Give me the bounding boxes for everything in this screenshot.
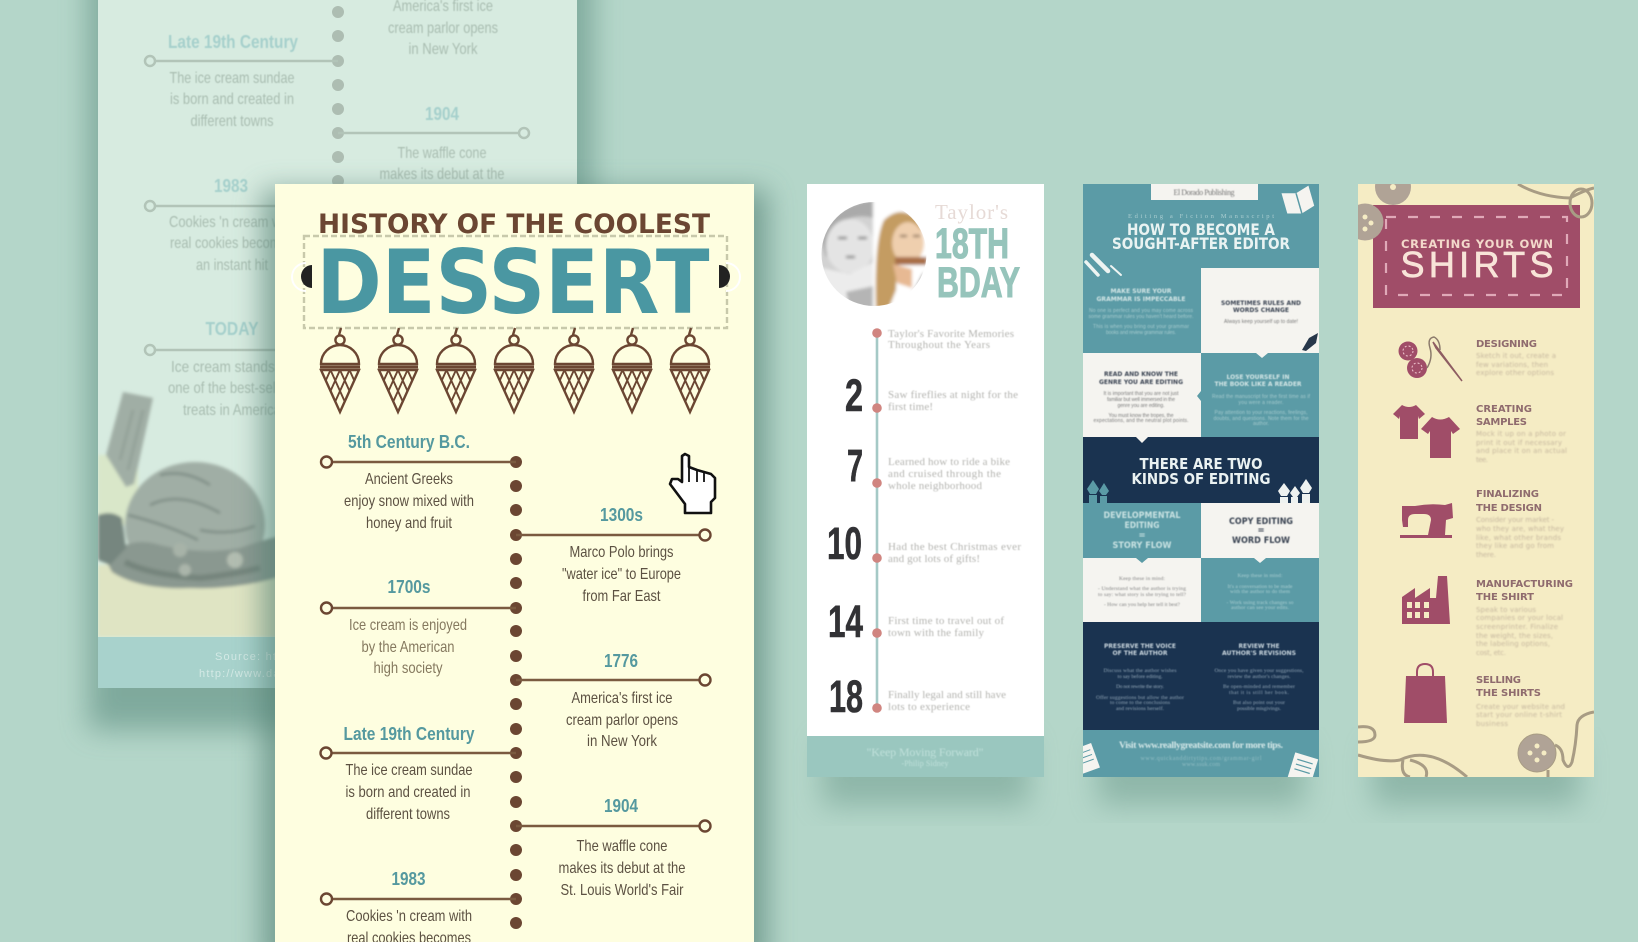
footer: visit site: Visit www.reallygreatsite.com for more tips.: [1119, 741, 1283, 751]
block: copy editing tips: It's a conversation to be made: [1228, 584, 1293, 590]
grid block: rules change: WORDS CHANGE: [1233, 307, 1289, 314]
step: selling the shirts: Create your website and: [1476, 703, 1565, 711]
memory descriptions: [888, 328, 1021, 713]
ghost timeline text: [168, 0, 505, 419]
ghost timeline text: Cookies 'n cream with: [169, 214, 295, 231]
panel: Taylor's 18th bday timeline: [807, 184, 1044, 777]
button: bottom right: [1518, 734, 1556, 772]
ghost timeline text: one of the best-selling: [168, 380, 296, 397]
block: developmental tips: Keep these in mind:: [1119, 576, 1165, 582]
block: copy editing tips: with the author to do them: [1230, 589, 1291, 595]
ghost timeline text: real cookies becomes: [170, 235, 294, 252]
block: preserve and review: Offer suggestions but allow the author: [1096, 694, 1184, 701]
block: copy editing tips: - Work using track changes so: [1226, 600, 1294, 606]
grid block: lose yourself: Read the manuscript for the first time as if: [1212, 394, 1311, 400]
block: preserve and review: Once you have given your suggestions,: [1214, 668, 1304, 674]
step: manufacturing the shirt: cost, etc.: [1476, 649, 1506, 657]
photo: ice cream scoop with wafer: [98, 392, 288, 637]
timeline entries: left column: high society: [374, 660, 442, 677]
step: creating samples: and place it on an actual: [1476, 447, 1567, 455]
ghost timeline text: The ice cream sundae: [170, 70, 295, 87]
band: there are two kinds of editing: [1083, 437, 1319, 503]
timeline: dotted spine with branches: [320, 456, 710, 929]
footer band with quote: [807, 736, 1044, 777]
timeline entries: left column: Late 19th Century: [344, 724, 474, 744]
block: preserve and review: [1083, 622, 1319, 730]
heading: Taylor's 18th bday: Taylor's: [935, 200, 1008, 224]
right frame handle: [719, 263, 740, 291]
step: manufacturing the shirt: screenprinter. Finalize: [1476, 623, 1558, 631]
age numbers: 7: [847, 440, 863, 491]
timeline entries: left column: The ice cream sundae: [346, 762, 473, 779]
heading: how to become a sought-after editor: SOUGHT-AFTER EDITOR: [1112, 234, 1290, 253]
grid block: lose yourself: Pay attention to your reactions, feelings,: [1214, 410, 1308, 416]
step: creating samples: tee.: [1476, 456, 1488, 464]
memory descriptions: whole neighborhood: [888, 480, 982, 492]
step: creating samples: CREATING: [1476, 404, 1532, 415]
header: creating your own shirts: SHIRTS: [1400, 244, 1554, 285]
ghost timeline text: 1904: [425, 104, 459, 124]
memory descriptions: lots to experience: [888, 701, 970, 713]
header: creating your own shirts: [1373, 205, 1580, 308]
block: preserve and review: OF THE AUTHOR: [1112, 650, 1168, 657]
step: creating samples: Mock it up on a photo or: [1476, 430, 1566, 438]
step: finalizing the design: [1476, 489, 1564, 559]
block: preserve and review: REVIEW THE: [1238, 643, 1280, 650]
ghost timeline text: Ice cream stands as: [171, 359, 293, 376]
panel: creating your own shirts: [1346, 169, 1594, 777]
block: preserve and review: to say before editing.: [1118, 673, 1163, 680]
heading: how to become a sought-after editor: [1113, 214, 1290, 249]
memory descriptions: town with the family: [888, 627, 984, 639]
icon: sewing machine: [1400, 503, 1453, 538]
grid block: read the genre: familiar but well immersed in the: [1107, 397, 1175, 403]
timeline entries: left column: is born and created in: [346, 784, 470, 801]
block: copy editing: COPY EDITING: [1229, 517, 1293, 527]
timeline entries: left column: different towns: [366, 806, 450, 823]
left frame handle: [292, 263, 312, 291]
ghost footer band: http://www.dailymeal.com/history: [199, 668, 397, 680]
grid block: lose yourself: you were a reader.: [1238, 400, 1284, 406]
step: manufacturing the shirt: THE SHIRT: [1476, 592, 1534, 603]
footer: visit site: www.ssuk.com: [1182, 762, 1220, 768]
timeline entries: left column: 1983: [392, 869, 426, 889]
timeline entries: right column: 1300s: [600, 505, 643, 525]
ghost timeline text: an instant hit: [196, 257, 268, 274]
age numbers: [827, 370, 863, 722]
timeline entries: left column: enjoy snow mixed with: [344, 493, 474, 510]
timeline entries: right column: The waffle cone: [576, 838, 668, 855]
step: designing: few variations, then: [1476, 361, 1548, 369]
timeline line and markers: [872, 328, 882, 713]
step: finalizing the design: Consider your market -: [1476, 516, 1554, 524]
timeline entries: right column: 1776: [604, 651, 638, 671]
ghost footer band: Source: https://www.history.com/: [215, 651, 412, 663]
footer: visit site: www.quickanddirtytips.com/grammar-girl: [1140, 756, 1262, 762]
timeline entries: right column: from Far East: [582, 588, 661, 605]
icon: white pen nibs: [1278, 479, 1312, 503]
step: manufacturing the shirt: companies or your local: [1476, 614, 1563, 622]
publisher tag: [1151, 184, 1258, 200]
step: selling the shirts: business: [1476, 720, 1508, 728]
grid block: grammar: This is when you bring out your grammar: [1093, 324, 1189, 330]
icon: note sheet left: [1083, 743, 1100, 774]
ghost timeline text: The waffle cone: [398, 145, 487, 162]
grid block: lose yourself: doubts, and questions. Note them for the: [1214, 416, 1309, 422]
grid block: grammar: [1088, 288, 1205, 336]
footer: visit site: [1119, 741, 1283, 768]
block: developmental editing: =: [1138, 531, 1146, 541]
step: designing: Sketch it out, create a: [1476, 352, 1556, 360]
step: finalizing the design: who they are, what they: [1476, 525, 1564, 533]
heading: Taylor's 18th bday: 18TH: [935, 220, 1009, 268]
timeline entries: right column: cream parlor opens: [566, 712, 678, 729]
block: developmental editing: STORY FLOW: [1112, 541, 1172, 551]
button: left: [1358, 204, 1384, 240]
grid block: lose yourself: author.: [1253, 421, 1269, 427]
memory descriptions: First time to travel out of: [888, 615, 1004, 627]
grid block: read the genre: expectations, and the neutral plot points.: [1094, 418, 1188, 424]
block: copy editing: WORD FLOW: [1232, 536, 1291, 546]
block: preserve and review: AUTHOR'S REVISIONS: [1222, 650, 1296, 657]
block: preserve and review: Do not rewrite the story.: [1116, 684, 1165, 690]
step: designing: DESIGNING: [1476, 339, 1537, 350]
memory descriptions: and got lots of gifts!: [888, 553, 980, 565]
timeline entries: right column: in New York: [587, 733, 658, 750]
memory descriptions: Finally legal and still have: [888, 689, 1006, 701]
age numbers: 10: [827, 518, 862, 569]
timeline entries: left column: [344, 432, 474, 942]
footer band with quote: -Philip Sidney: [902, 759, 948, 768]
ghost timeline text: TODAY: [206, 319, 258, 339]
ghost footer band: [98, 637, 275, 688]
block: developmental editing: DEVELOPMENTAL: [1104, 511, 1181, 521]
grid block: grammar: MAKE SURE YOUR: [1110, 288, 1172, 295]
step: finalizing the design: there.: [1476, 551, 1496, 559]
icon: pointer hand cursor: [670, 454, 715, 513]
timeline entries: left column: by the American: [362, 639, 454, 656]
icon: teal pen nibs: [1087, 480, 1109, 503]
block: preserve and review: to come to the conclusions: [1110, 700, 1170, 706]
step: finalizing the design: they like and go from: [1476, 542, 1554, 550]
block: developmental tips: [1083, 558, 1201, 622]
step: creating samples: SAMPLES: [1476, 417, 1527, 428]
step: finalizing the design: like, what other brands: [1476, 534, 1561, 542]
heading: Taylor's 18th bday: [935, 200, 1020, 307]
block: preserve and review: review the author's changes.: [1228, 674, 1291, 680]
timeline entries: right column: "water ice" to Europe: [562, 566, 681, 583]
panel: how to become a sought-after editor: [1074, 184, 1319, 785]
timeline entries: right column: 1904: [604, 796, 638, 816]
step: manufacturing the shirt: MANUFACTURING: [1476, 579, 1573, 590]
step: creating samples: print it out if necessary: [1476, 439, 1562, 447]
timeline entries: right column: St. Louis World's Fair: [560, 882, 684, 899]
icon: fountain pen: [1302, 333, 1318, 351]
step: designing: explore other options: [1476, 369, 1554, 377]
decorative threads: [1358, 184, 1594, 777]
grid block: read the genre: GENRE YOU ARE EDITING: [1099, 379, 1183, 386]
step: finalizing the design: THE DESIGN: [1476, 503, 1542, 514]
grid block: rules change: [1201, 268, 1319, 358]
grid block: read the genre: It is important that you are not just: [1104, 391, 1179, 397]
age numbers: 2: [845, 370, 863, 421]
grid block: grammar: GRAMMAR IS IMPECCABLE: [1096, 296, 1186, 303]
icon: buttons with needle and thread: [1398, 337, 1462, 381]
grid block: lose yourself: [1197, 374, 1311, 427]
header: creating your own shirts: CREATING YOUR OWN: [1401, 237, 1553, 251]
grid block: read the genre: You must know the tropes, the: [1108, 413, 1174, 419]
memory descriptions: Had the best Christmas ever: [888, 541, 1021, 553]
block: copy editing tips: Keep these in mind:: [1238, 573, 1283, 579]
block: developmental editing: [1104, 511, 1181, 551]
timeline entries: left column: 5th Century B.C.: [348, 432, 470, 452]
block: developmental tips: - Understand what the author is trying: [1098, 586, 1186, 592]
block: preserve and review: Be open-minded and remember: [1223, 684, 1295, 690]
block: copy editing: =: [1257, 526, 1265, 536]
button: top: [1375, 184, 1411, 205]
band: there are two kinds of editing: THERE ARE TWO: [1140, 455, 1262, 473]
ghost timeline text: is born and created in: [170, 91, 294, 108]
footer band with quote: "Keep Moving Forward": [866, 745, 984, 759]
icon: open book: [1282, 186, 1314, 214]
timeline entries: left column: 1700s: [388, 577, 430, 597]
band: there are two kinds of editing: KINDS OF EDITING: [1132, 470, 1270, 488]
heading: Taylor's 18th bday: BDAY: [937, 259, 1020, 307]
grid block: grammar: some grammar rules you haven't heard before.: [1088, 314, 1194, 320]
block: preserve and review: Discuss what the author wishes: [1104, 668, 1176, 674]
block: preserve and review: that it is still her book.: [1229, 690, 1290, 696]
ghost timeline text: treats in America: [183, 402, 281, 419]
heading: how to become a sought-after editor: Editing a Fiction Manuscript: [1128, 213, 1274, 220]
step: selling the shirts: SELLING: [1476, 675, 1521, 686]
photo: split portrait circle: [820, 200, 928, 310]
memory descriptions: Saw fireflies at night for the: [888, 389, 1018, 401]
block: preserve and review: But also point out your: [1233, 700, 1285, 706]
grid block: read the genre: genre you are editing.: [1118, 403, 1164, 409]
grid block: read the genre: READ AND KNOW THE: [1104, 371, 1178, 378]
block: developmental tips: to say: what story is she trying to tell?: [1098, 592, 1187, 598]
step: finalizing the design: FINALIZING: [1476, 489, 1539, 500]
step: selling the shirts: [1476, 675, 1565, 728]
timeline entries: right column: [558, 505, 686, 899]
icon: note sheet right: [1288, 752, 1318, 777]
memory descriptions: first time!: [888, 401, 933, 413]
block: copy editing tips: [1226, 558, 1294, 610]
timeline entries: right column: Marco Polo brings: [570, 544, 674, 561]
timeline entries: right column: makes its debut at the: [558, 860, 686, 877]
step: manufacturing the shirt: the weight, the sizes,: [1476, 632, 1553, 640]
memory descriptions: and cruised through the: [888, 468, 1001, 480]
ghost timeline text: 1983: [214, 176, 248, 196]
step: manufacturing the shirt: the labeling options,: [1476, 640, 1550, 648]
timeline entries: left column: Ice cream is enjoyed: [349, 617, 467, 634]
grid block: rules change: SOMETIMES RULES AND: [1221, 300, 1301, 307]
ghost timeline text: Late 19th Century: [168, 32, 298, 52]
block: developmental editing: EDITING: [1124, 521, 1160, 531]
grid block: rules change: Always keep yourself up to date!: [1224, 319, 1298, 325]
heading: history of the coolest: HISTORY OF THE COOLEST: [318, 209, 711, 240]
timeline entries: left column: Ancient Greeks: [365, 471, 453, 488]
step: selling the shirts: start your online t-shirt: [1476, 711, 1562, 719]
block: developmental tips: - How can you help her tell it best?: [1104, 602, 1181, 608]
icon: shopping bag: [1404, 664, 1447, 723]
memory descriptions: Taylor's Favorite Memories: [888, 328, 1014, 340]
panel: faded dessert infographic behind: [98, 0, 577, 688]
step: creating samples: [1476, 404, 1567, 464]
dashed title frame: [304, 236, 727, 328]
timeline entries: right column: America's first ice: [572, 690, 673, 707]
block: copy editing: [1201, 503, 1319, 558]
ghost timeline text: different towns: [190, 113, 274, 130]
memory descriptions: Throughout the Years: [888, 339, 990, 351]
ghost timeline text: makes its debut at the: [380, 166, 505, 183]
ghost timeline text: cream parlor opens: [388, 20, 498, 37]
step: designing: [1476, 339, 1556, 377]
step: manufacturing the shirt: [1476, 579, 1573, 657]
grid block: read the genre: [1083, 353, 1201, 437]
panel: history of the coolest dessert: [275, 184, 754, 942]
icon: t-shirts: [1393, 405, 1460, 458]
heading: how to become a sought-after editor: HOW TO BECOME A: [1127, 220, 1276, 239]
icon: factory: [1402, 576, 1450, 624]
block: preserve and review: and revisions herself.: [1116, 705, 1165, 712]
age numbers: 14: [828, 596, 863, 647]
timeline entries: left column: Cookies 'n cream with: [346, 908, 472, 925]
icon: pencils: [1086, 255, 1121, 275]
icon row: ice cream cones: [320, 328, 710, 412]
block: preserve and review: PRESERVE THE VOICE: [1104, 643, 1176, 650]
heading: dessert: DESSERT: [316, 231, 710, 334]
grid block: grammar: books and review grammar rules.: [1106, 330, 1176, 336]
block: preserve and review: possible misgivings.: [1237, 706, 1282, 712]
memory descriptions: Learned how to ride a bike: [888, 456, 1010, 468]
grid block: lose yourself: LOSE YOURSELF IN: [1226, 374, 1290, 381]
block: copy editing tips: author can see your edits.: [1231, 605, 1290, 611]
age numbers: 18: [829, 671, 863, 722]
timeline entries: left column: honey and fruit: [366, 515, 452, 532]
grid block: grammar: No one is perfect and you may come across: [1089, 308, 1194, 314]
step: selling the shirts: THE SHIRTS: [1476, 688, 1541, 699]
step: manufacturing the shirt: Speak to various: [1476, 606, 1536, 614]
ghost timeline: [145, 6, 529, 355]
grid block: lose yourself: THE BOOK LIKE A READER: [1214, 381, 1302, 388]
ghost timeline text: in New York: [408, 41, 478, 58]
publisher tag: El Dorado Publishing: [1174, 188, 1234, 197]
